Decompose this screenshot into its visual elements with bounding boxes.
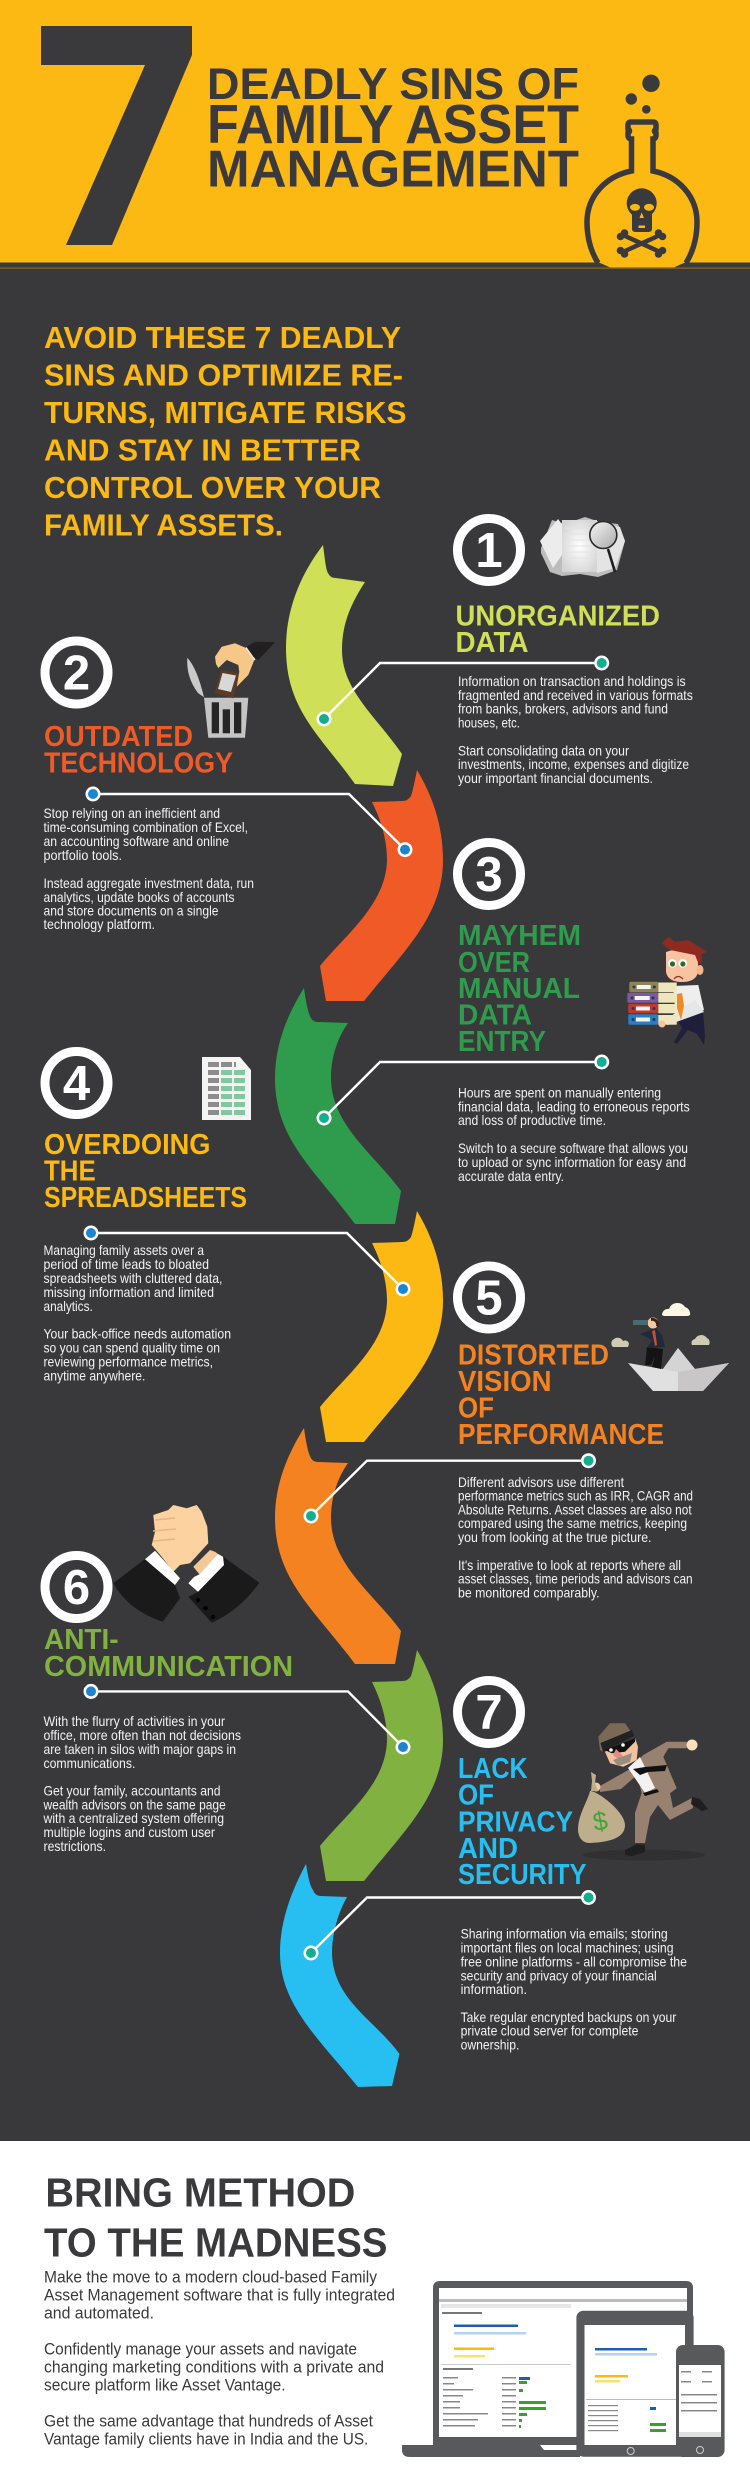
heading bbox=[456, 600, 660, 659]
body text: With the flurry of activities in your bbox=[44, 1714, 225, 1729]
connector bbox=[316, 656, 609, 726]
body text: free online platforms - all compromise the bbox=[461, 1954, 687, 1969]
body text: and loss of productive time. bbox=[458, 1113, 606, 1128]
body text: portfolio tools. bbox=[44, 848, 122, 863]
body text: asset classes, time periods and advisors can bbox=[458, 1572, 693, 1587]
body text: investments, income, expenses and digitize bbox=[458, 757, 689, 772]
intro statement: SINS AND OPTIMIZE RE- bbox=[44, 358, 403, 393]
heading: OVERDOING bbox=[44, 1129, 210, 1161]
body text: reviewing performance metrics, bbox=[44, 1354, 213, 1369]
body text: missing information and limited bbox=[44, 1285, 214, 1300]
number badge 2: 2 bbox=[63, 646, 90, 700]
intro statement: AND STAY IN BETTER bbox=[44, 433, 361, 468]
heading: SPREADSHEETS bbox=[44, 1182, 247, 1214]
number badge 5: 5 bbox=[475, 1272, 503, 1326]
body text: information. bbox=[461, 1982, 527, 1997]
body text: are taken in silos with major gaps in bbox=[44, 1742, 236, 1757]
body text: to upload or sync information for easy and bbox=[458, 1155, 686, 1170]
body text: accurate data entry. bbox=[458, 1169, 564, 1184]
body text: compared using the same metrics, keeping bbox=[458, 1516, 687, 1531]
big numeral 7 bbox=[41, 26, 192, 245]
icon: poison flask bbox=[587, 75, 697, 267]
icon: man with telescope on paper boat bbox=[611, 1303, 729, 1391]
number badge 7 bbox=[458, 1680, 520, 1744]
heading: COMMUNICATION bbox=[44, 1651, 293, 1683]
heading: SECURITY bbox=[458, 1859, 586, 1891]
body text: Get your family, accountants and bbox=[44, 1784, 220, 1799]
closing body text: Asset Management software that is fully integrated bbox=[44, 2285, 395, 2304]
ribbon 5 bbox=[275, 1428, 401, 1664]
icon: thief with money bag bbox=[578, 1723, 708, 1860]
heading: DISTORTED bbox=[458, 1340, 609, 1372]
heading: OF bbox=[458, 1780, 494, 1812]
ribbon 3 bbox=[275, 988, 401, 1224]
body text: anytime anywhere. bbox=[44, 1368, 145, 1383]
section 1: unorganized data bbox=[316, 517, 693, 786]
body text: time-consuming combination of Excel, bbox=[44, 820, 248, 835]
body text: be monitored comparably. bbox=[458, 1586, 600, 1600]
heading: OVER bbox=[458, 947, 530, 979]
body text: your important financial documents. bbox=[458, 771, 653, 786]
heading: PERFORMANCE bbox=[458, 1419, 664, 1451]
phone bbox=[676, 2345, 725, 2457]
device mockups bbox=[402, 2281, 725, 2457]
body text: period of time leads to bloated bbox=[44, 1257, 209, 1272]
body text: and store documents on a single bbox=[44, 904, 218, 918]
body text: Your back-office needs automation bbox=[44, 1327, 231, 1342]
heading bbox=[44, 721, 233, 780]
body text: fragmented and received in various formats bbox=[458, 688, 693, 703]
number badge 6 bbox=[45, 1556, 108, 1618]
title: FAMILY ASSET bbox=[207, 93, 579, 155]
body text bbox=[458, 674, 693, 786]
body text: analytics, update books of accounts bbox=[44, 890, 235, 905]
body text: restrictions. bbox=[44, 1839, 106, 1854]
body text: technology platform. bbox=[44, 917, 155, 932]
body text: from banks, brokers, advisors and fund bbox=[458, 702, 668, 717]
body text: an accounting software and online bbox=[44, 834, 229, 849]
heading: MANUAL bbox=[458, 973, 580, 1005]
body text: Managing family assets over a bbox=[44, 1243, 204, 1258]
number badge 3: 3 bbox=[475, 848, 503, 902]
body text bbox=[458, 1475, 693, 1600]
heading: PRIVACY bbox=[458, 1806, 573, 1838]
closing body text: Vantage family clients have in India and the US. bbox=[44, 2429, 368, 2448]
heading: ANTI- bbox=[44, 1624, 119, 1656]
heading: VISION bbox=[458, 1366, 552, 1398]
section 3: mayhem over manual data entry bbox=[316, 842, 707, 1184]
icon: thief with money bag: $ bbox=[590, 1805, 610, 1837]
intro statement bbox=[44, 320, 406, 543]
closing body text: secure platform like Asset Vantage. bbox=[44, 2375, 286, 2394]
heading: LACK bbox=[458, 1753, 528, 1785]
closing body text: Confidently manage your assets and navigate bbox=[44, 2339, 357, 2358]
body text: Switch to a secure software that allows you bbox=[458, 1141, 688, 1156]
body text: important files on local machines; using bbox=[461, 1940, 674, 1956]
body text: Hours are spent on manually entering bbox=[458, 1086, 661, 1100]
ribbon 4 bbox=[320, 1211, 443, 1442]
body text: Sharing information via emails; storing bbox=[461, 1927, 668, 1942]
section 4: overdoing the spreadsheets bbox=[44, 1052, 410, 1383]
heading: ENTRY bbox=[458, 1026, 546, 1058]
body text: communications. bbox=[44, 1756, 135, 1771]
body text: ownership. bbox=[461, 2037, 519, 2052]
closing body text: Make the move to a modern cloud-based Family bbox=[44, 2267, 378, 2286]
body text bbox=[44, 806, 254, 932]
connector bbox=[84, 1226, 410, 1296]
heading: OUTDATED bbox=[44, 721, 193, 753]
closing heading bbox=[44, 2170, 387, 2266]
heading: UNORGANIZED bbox=[456, 600, 660, 632]
body text: It's imperative to look at reports where all bbox=[458, 1558, 681, 1573]
number badge 1: 1 bbox=[475, 524, 503, 578]
ribbon 7 bbox=[280, 1864, 400, 2087]
body text bbox=[458, 1086, 690, 1184]
laptop bbox=[402, 2281, 693, 2457]
heading bbox=[44, 1129, 247, 1214]
body text: so you can spend quality time on bbox=[44, 1340, 220, 1356]
body text bbox=[461, 1927, 687, 2052]
body text: you from looking at the true picture. bbox=[458, 1530, 652, 1545]
number badge 7: 7 bbox=[475, 1686, 503, 1740]
body text: Start consolidating data on your bbox=[458, 743, 629, 758]
heading bbox=[458, 920, 581, 1058]
body text: performance metrics such as IRR, CAGR and bbox=[458, 1489, 693, 1504]
icon: hand dropping phone in bin bbox=[187, 642, 275, 738]
tablet bbox=[576, 2311, 694, 2457]
body text: houses, etc. bbox=[458, 716, 520, 730]
connector bbox=[86, 786, 412, 857]
body text: financial data, leading to erroneous reports bbox=[458, 1099, 690, 1114]
body text: analytics. bbox=[44, 1299, 93, 1314]
body text: Take regular encrypted backups on your bbox=[461, 2010, 677, 2025]
body text bbox=[44, 1243, 231, 1383]
heading: AND bbox=[458, 1833, 518, 1865]
number badge 3 bbox=[458, 842, 520, 906]
body text: office, more often than not decisions bbox=[44, 1728, 241, 1743]
section 7: lack of privacy and security bbox=[304, 1680, 708, 2052]
body text: multiple logins and custom user bbox=[44, 1825, 215, 1840]
body text: with a centralized system offering bbox=[43, 1811, 224, 1826]
body text: Instead aggregate investment data, run bbox=[44, 876, 254, 891]
connector bbox=[84, 1684, 410, 1754]
ribbon 2 bbox=[320, 770, 443, 1001]
intro statement: CONTROL OVER YOUR bbox=[44, 470, 381, 505]
number badge 6: 6 bbox=[63, 1561, 90, 1615]
heading: DATA bbox=[456, 627, 528, 659]
heading bbox=[44, 1624, 293, 1683]
heading: MAYHEM bbox=[458, 920, 581, 952]
body text: spreadsheets with cluttered data, bbox=[44, 1271, 222, 1286]
section 5: distorted vision of performance bbox=[304, 1266, 729, 1600]
section 2: outdated technology bbox=[44, 641, 412, 932]
connector bbox=[304, 1890, 596, 1960]
intro statement: FAMILY ASSETS. bbox=[44, 508, 283, 543]
icon: man carrying binders bbox=[627, 937, 707, 1045]
number badge 5 bbox=[458, 1266, 520, 1329]
title: DEADLY SINS OF bbox=[207, 60, 579, 109]
number badge 4 bbox=[45, 1052, 108, 1114]
closing body text: changing marketing conditions with a private and bbox=[44, 2357, 384, 2376]
icon: clasped hands in suits bbox=[113, 1505, 259, 1623]
connector bbox=[304, 1453, 596, 1524]
connector bbox=[316, 1054, 609, 1126]
heading bbox=[458, 1753, 586, 1891]
icon: spreadsheet page bbox=[202, 1057, 251, 1120]
heading bbox=[458, 1340, 664, 1451]
body text: wealth advisors on the same page bbox=[43, 1797, 226, 1812]
title: MANAGEMENT bbox=[207, 140, 579, 198]
closing heading: TO THE MADNESS bbox=[44, 2220, 387, 2266]
number badge 4: 4 bbox=[63, 1057, 90, 1111]
intro statement: AVOID THESE 7 DEADLY bbox=[44, 320, 401, 355]
closing body text: and automated. bbox=[44, 2303, 154, 2322]
body text: Stop relying on an inefficient and bbox=[44, 806, 220, 821]
body text: Different advisors use different bbox=[458, 1475, 624, 1490]
ribbon 1 bbox=[286, 545, 402, 786]
heading: THE bbox=[44, 1156, 96, 1188]
title bbox=[207, 60, 579, 198]
ribbon 6 bbox=[320, 1650, 443, 1881]
heading: TECHNOLOGY bbox=[44, 748, 233, 780]
icon: scattered papers with magnifier bbox=[540, 517, 625, 577]
number badge 2 bbox=[45, 641, 108, 704]
body text: private cloud server for complete bbox=[461, 2024, 638, 2039]
closing body text: Get the same advantage that hundreds of Asset bbox=[44, 2411, 373, 2430]
closing panel bbox=[0, 2141, 750, 2490]
body text bbox=[43, 1714, 241, 1854]
body text: security and privacy of your financial bbox=[461, 1968, 657, 1983]
body text: Information on transaction and holdings is bbox=[458, 674, 686, 689]
number badge 1 bbox=[458, 518, 520, 582]
closing heading: BRING METHOD bbox=[45, 2170, 355, 2216]
intro statement: TURNS, MITIGATE RISKS bbox=[44, 395, 406, 430]
heading: OF bbox=[458, 1392, 494, 1424]
body text: Absolute Returns. Asset classes are also not bbox=[458, 1502, 692, 1517]
section 6: anti-communication bbox=[43, 1505, 411, 1854]
heading: DATA bbox=[458, 1000, 532, 1032]
closing body text bbox=[44, 2267, 395, 2448]
header band bbox=[0, 0, 750, 269]
